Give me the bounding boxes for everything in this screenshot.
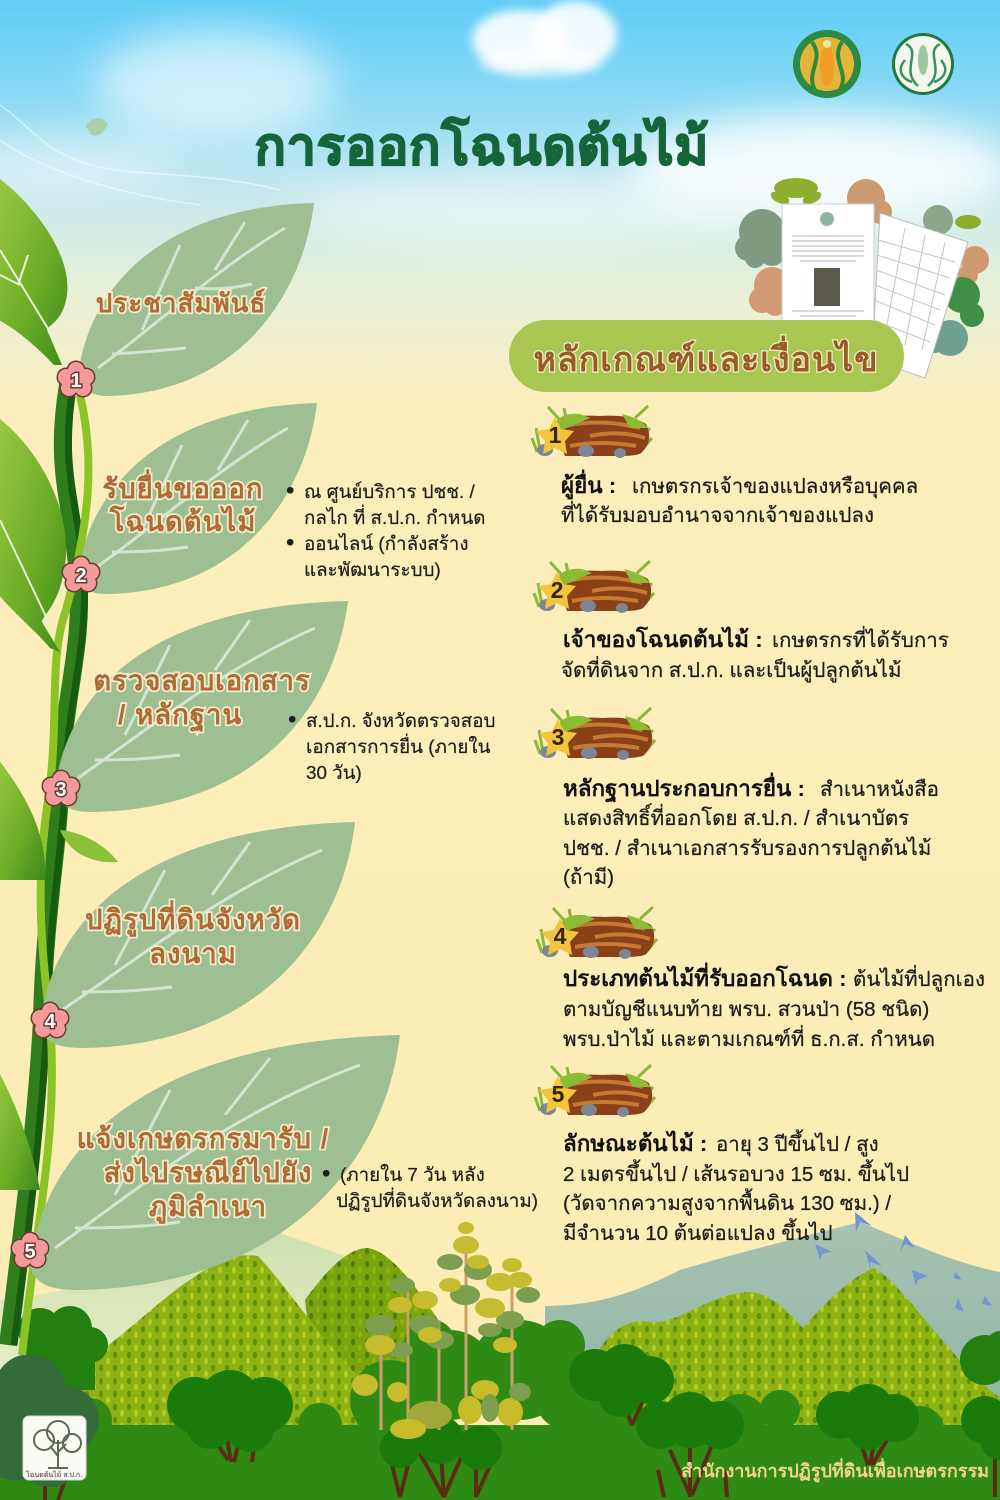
shrub trees	[0, 1344, 1000, 1500]
criterion 1: ที่ได้รับมอบอำนาจจากเจ้าของแปลง	[561, 501, 874, 527]
background bushes	[18, 1306, 1000, 1390]
criterion 3: แสดงสิทธิ์ที่ออกโดย ส.ป.ก. / สำเนาบัตร	[563, 803, 909, 830]
log 2	[534, 561, 654, 613]
bullet notes: และพัฒนาระบบ)	[304, 559, 441, 580]
bullet notes: เอกสารการยื่น (ภายใน	[306, 733, 491, 757]
process leaf 4	[40, 822, 355, 1048]
bullet notes: •	[286, 477, 294, 504]
number flowers: 4	[44, 1011, 56, 1033]
label: step 2: รับยื่นขอออก	[102, 469, 264, 504]
birds	[815, 1212, 992, 1312]
number flowers	[10, 360, 100, 1268]
criterion 4	[563, 962, 985, 1051]
number flowers: 5	[24, 1241, 36, 1263]
process leaf 5: ภูมิลำเนา	[149, 1191, 267, 1224]
document 2	[872, 213, 968, 378]
stem	[8, 385, 88, 1355]
log 4	[537, 907, 657, 959]
distant mountains	[0, 1222, 1000, 1420]
logo: land title tree: โฉนดต้นไม้ ส.ป.ก.	[26, 1470, 82, 1479]
number flowers: 3	[55, 779, 67, 801]
criterion 3: สำเนาหนังสือ	[820, 778, 939, 801]
clouds	[0, 1, 1000, 245]
criterion 2: เกษตรกรที่ได้รับการ	[772, 626, 949, 652]
criterion 3	[563, 772, 939, 889]
process leaf 4: ลงนาม	[149, 938, 237, 969]
log 2: 2	[551, 577, 563, 603]
trees behind documents	[735, 178, 989, 356]
criterion 1: เกษตรกรเจ้าของแปลงหรือบุคคล	[632, 475, 918, 499]
bullet notes: ส.ป.ก. จังหวัดตรวจสอบ	[306, 710, 495, 731]
tall yellow trees	[352, 1222, 540, 1439]
criterion 4: ต้นไม้ที่ปลูกเอง	[853, 965, 985, 992]
criterion 1	[561, 469, 918, 527]
criterion 2: จัดที่ดินจาก ส.ป.ก. และเป็นผู้ปลูกต้นไม้	[561, 656, 901, 683]
process leaf 2: โฉนดต้นไม้	[109, 504, 256, 537]
bullet notes: •	[288, 706, 296, 733]
log 3	[535, 708, 655, 760]
criterion 4: พรบ.ป่าไม้ และตามเกณฑ์ที่ ธ.ก.ส. กำหนด	[563, 1025, 935, 1051]
process leaf 5	[30, 1035, 400, 1290]
criterion 2	[561, 626, 949, 683]
criterion 3: หลักฐานประกอบการยื่น :	[563, 772, 805, 803]
criterion 2: เจ้าของโฉนดต้นไม้ :	[563, 626, 763, 652]
green hills	[72, 1248, 1000, 1450]
title: การออกโฉนดต้นไม้	[255, 116, 709, 175]
process leaf 3: / หลักฐาน	[118, 699, 242, 733]
criteria heading pill	[509, 320, 904, 392]
criterion 5: มีจำนวน 10 ต้นต่อแปลง ขึ้นไป	[563, 1218, 833, 1245]
criterion 1: ผู้ยื่น :	[561, 469, 616, 500]
small leaf icon	[86, 118, 108, 136]
number flowers: 1	[70, 370, 82, 392]
footer agency name: สำนักงานการปฏิรูปที่ดินเพื่อเกษตรกรรม	[681, 1458, 989, 1483]
log 5	[535, 1065, 655, 1117]
landscape	[0, 1222, 1000, 1500]
process leaf 2	[78, 403, 317, 594]
logo: land title tree	[23, 1416, 86, 1480]
bullet notes: ออนไลน์ (กำลังสร้าง	[304, 533, 469, 554]
criterion 5	[563, 1129, 909, 1245]
wind swirls	[0, 105, 280, 205]
watercolor leaves	[0, 175, 118, 1190]
label: step 3: ตรวจสอบเอกสาร	[93, 665, 311, 696]
bullet notes	[286, 477, 538, 1212]
process leaf 5: ส่งไปรษณีย์ไปยัง	[104, 1156, 312, 1188]
bullet notes: ณ ศูนย์บริการ ปชช. /	[304, 481, 475, 503]
log 5: 5	[552, 1081, 565, 1107]
criterion 5: 2 เมตรขึ้นไป / เส้นรอบวง 15 ซม. ขึ้นไป	[563, 1159, 909, 1186]
criterion 5: ลักษณะต้นไม้ :	[563, 1130, 707, 1156]
criterion 5: (วัดจากความสูงจากพื้นดิน 130 ซม.) /	[563, 1188, 891, 1216]
criteria heading pill: หลักเกณฑ์และเงื่อนไข	[533, 335, 879, 379]
process leaf 3	[55, 601, 348, 812]
bullet notes: กลไก ที่ ส.ป.ก. กำหนด	[304, 504, 485, 528]
label: step 1: ประชาสัมพันธ์	[96, 288, 266, 318]
criterion 4: ประเภทต้นไม้ที่รับออกโฉนด :	[563, 962, 847, 991]
criterion 5: อายุ 3 ปีขึ้นไป / สูง	[716, 1129, 879, 1157]
label: step 5: แจ้งเกษตรกรมารับ /	[77, 1123, 329, 1154]
log 4: 4	[554, 923, 567, 949]
forest ground	[0, 1319, 1000, 1500]
criterion 4: ตามบัญชีแนบท้าย พรบ. สวนป่า (58 ชนิด)	[563, 998, 929, 1021]
criterion 3: ปชช. / สำเนาเอกสารรับรองการปลูกต้นไม้	[563, 836, 931, 861]
bullet notes: ปฏิรูปที่ดินจังหวัดลงนาม)	[336, 1187, 538, 1212]
label: step 4: ปฏิรูปที่ดินจังหวัด	[85, 900, 301, 937]
document 1	[782, 204, 874, 329]
log 1	[532, 406, 652, 458]
bullet notes: •	[322, 1160, 330, 1187]
bullet notes: •	[286, 529, 294, 556]
process leaf 1	[78, 203, 314, 396]
criterion 3: (ถ้ามี)	[563, 866, 614, 889]
bullet notes: (ภายใน 7 วัน หลัง	[340, 1164, 485, 1185]
number flowers: 2	[75, 565, 87, 587]
log 1: 1	[549, 422, 562, 448]
bullet notes: 30 วัน)	[306, 762, 362, 783]
log 3: 3	[552, 724, 564, 750]
logos	[793, 30, 954, 98]
